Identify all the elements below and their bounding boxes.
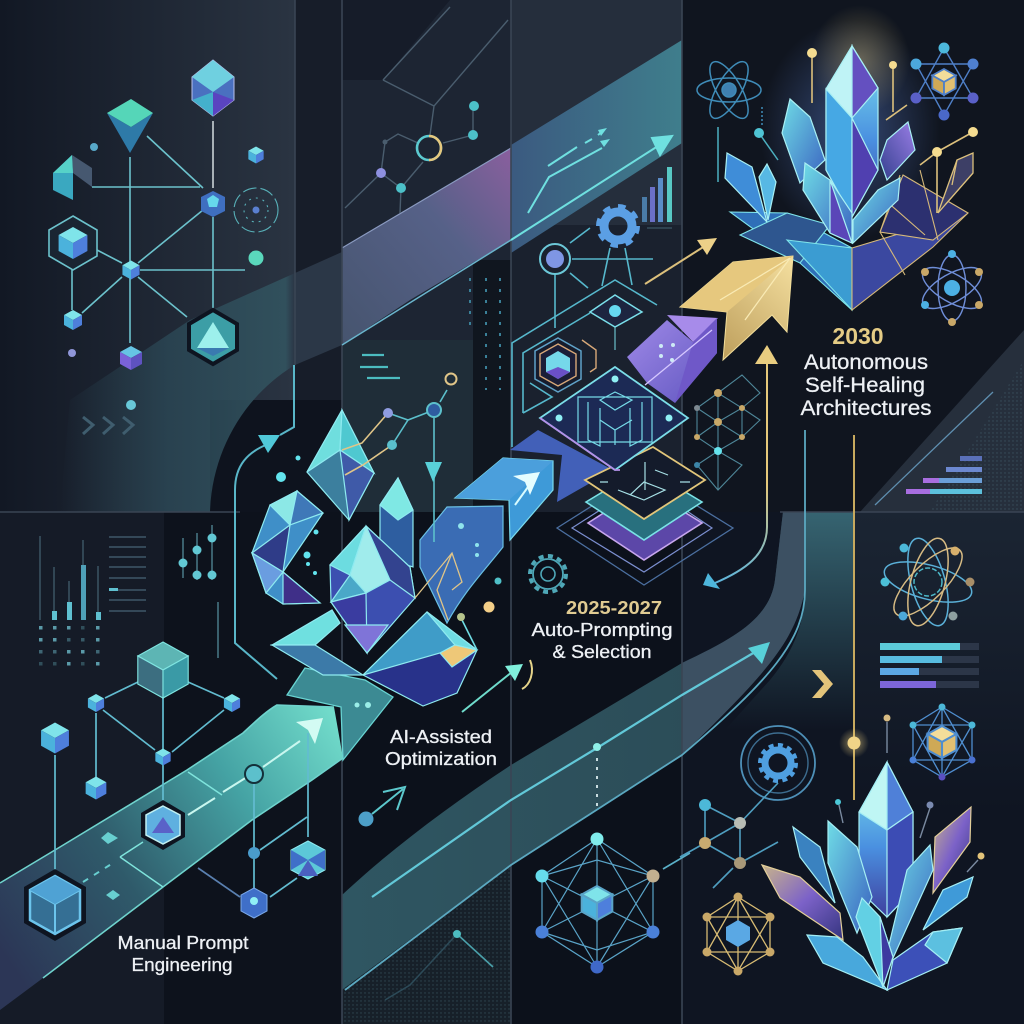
icon: big cube <box>138 642 188 698</box>
arrow: to milestone <box>462 660 532 712</box>
mini lines centre <box>360 355 400 378</box>
gold pins <box>835 714 984 872</box>
gold small arrow <box>645 238 717 284</box>
ribbon stage 6 (purple) <box>627 315 718 403</box>
right column atom <box>880 534 976 630</box>
left crystal cluster <box>252 410 477 706</box>
icon: target circle <box>540 244 570 274</box>
gem: left <box>252 491 323 604</box>
ribbon stage 5 (indigo) <box>510 430 613 502</box>
icon: right hex <box>291 841 325 879</box>
bottom centre hex net <box>536 832 690 974</box>
icon: small diamond <box>590 295 642 350</box>
icon: cube left <box>41 722 69 754</box>
top band arrows <box>511 128 672 240</box>
blue band <box>511 40 682 253</box>
icon: top gem <box>192 60 234 116</box>
gem: center <box>330 526 415 653</box>
icon: gold hex <box>702 892 774 976</box>
text: manual prompt engineering <box>118 933 248 975</box>
top left network <box>49 60 278 370</box>
icon: atom right <box>916 250 988 326</box>
dashed columns <box>470 278 500 390</box>
dotted lower panel <box>342 865 511 1024</box>
icon: left cube <box>53 155 92 200</box>
gem: tall <box>380 478 413 567</box>
node chain <box>342 374 477 650</box>
ribbon stage 1 (teal) <box>0 705 343 1010</box>
gold arrow head <box>680 256 793 360</box>
heading: 2030: Autonomous <box>804 350 928 374</box>
glow dots <box>276 456 502 612</box>
schematic hexagon frame <box>512 228 657 447</box>
arrow: lower mid <box>358 787 405 826</box>
ribbon stage 4 (bright blue) <box>455 458 553 540</box>
text: AI assisted <box>385 727 497 769</box>
pins and branches <box>807 48 978 213</box>
long arrow <box>372 642 770 897</box>
small bars right <box>906 456 982 494</box>
heading: 2030: Self-Healing <box>805 373 925 397</box>
heading: 2030: 2030 <box>832 323 884 349</box>
heading: 2030 <box>800 323 932 420</box>
sliders <box>178 525 218 658</box>
text: 2025-2027: & Selection <box>552 642 652 662</box>
text: 2025-2027 <box>532 598 672 662</box>
text: manual prompt engineering: Engineering <box>132 955 232 975</box>
icon: inverted gem <box>107 99 153 153</box>
ribbon stage 2 (teal wedge) <box>287 668 393 760</box>
layer stack <box>540 367 733 585</box>
lower right gear cluster <box>680 726 815 888</box>
icon: gem hex <box>141 800 185 850</box>
bottom left network <box>24 642 325 941</box>
icon: dark hex <box>189 310 237 364</box>
top center network <box>345 7 508 213</box>
heading: 2030: Architectures <box>800 396 932 420</box>
gold vertical line and node <box>839 435 869 800</box>
crystal shards <box>725 46 915 243</box>
gem: lower left <box>272 610 363 675</box>
gem: top <box>307 410 374 520</box>
nodes <box>64 146 264 330</box>
crystal base <box>730 170 968 310</box>
icon: hex gem <box>535 338 581 392</box>
gold wire crystal <box>938 153 973 213</box>
text: manual prompt engineering: Manual Prompt <box>118 933 248 953</box>
gem: lower right <box>363 612 477 706</box>
top curved band <box>60 252 342 512</box>
icon: radar <box>234 188 278 232</box>
lower diagonal band <box>342 512 805 990</box>
icon: hex star top right <box>910 42 978 120</box>
arrow: loop left <box>235 365 294 679</box>
top right dotted triangle <box>860 330 1024 512</box>
arrow head teal <box>703 573 720 589</box>
icon: atom top left <box>697 56 778 182</box>
purple band <box>342 148 511 345</box>
progress bars <box>880 643 979 688</box>
top-right crystal group <box>725 5 978 310</box>
gear outline <box>530 556 566 592</box>
line chart bottom <box>385 930 493 1000</box>
node chain <box>241 765 267 918</box>
gold chevron <box>812 670 833 698</box>
lower right crystal <box>762 762 973 990</box>
icon: bottom left hex <box>24 869 86 941</box>
chevrons <box>83 400 136 434</box>
icon: hex net right <box>910 704 976 780</box>
ribbon stage 3 (blue curve) <box>420 506 503 623</box>
text: 2025-2027: Auto-Prompting <box>532 620 672 640</box>
gold vertical arrow <box>715 345 778 583</box>
icon: left hex <box>49 216 97 270</box>
mini bar chart <box>642 167 672 228</box>
icon: gear <box>598 206 638 246</box>
text: 2025-2027: 2025-2027 <box>566 598 662 618</box>
text: AI assisted: AI-Assisted <box>390 727 492 747</box>
text: AI assisted: Optimization <box>385 749 497 769</box>
left chart <box>39 536 146 666</box>
icon: violet cube <box>120 346 142 370</box>
teal fade panel <box>725 512 853 730</box>
icon: lattice <box>694 375 760 490</box>
